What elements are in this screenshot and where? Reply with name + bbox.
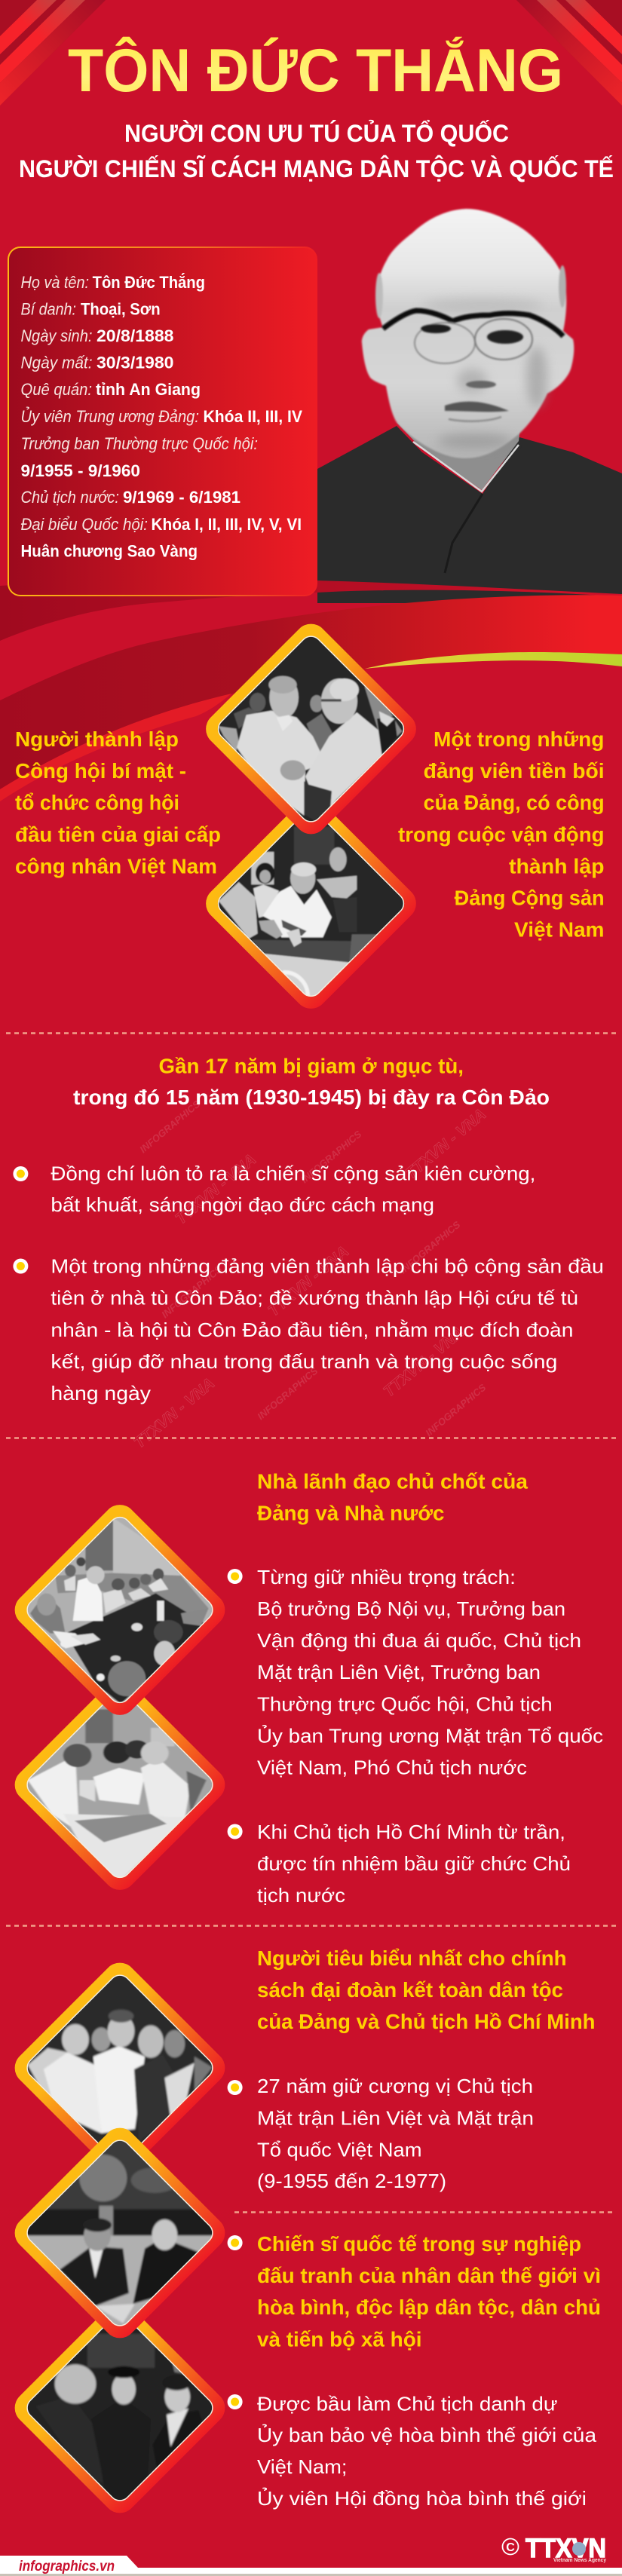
headline right: trong cuộc vận động (398, 823, 605, 846)
watermarks: INFOGRAPHICS (159, 1263, 225, 1320)
central committee: Ủy viên Trung ương Đảng: (21, 406, 199, 426)
decorative corner stripes right (516, 0, 622, 106)
bullet text: responsibilities: Bộ trưởng Bộ Nội vụ, Trưởng ban (257, 1597, 565, 1620)
decorative corner stripes left (0, 0, 106, 106)
bullet text: 27 years: Mặt trận Liên Việt và Mặt trận (257, 2106, 534, 2129)
watermarks: TTXVN - VNA (402, 1105, 489, 1183)
bullet text: responsibilities (257, 1566, 603, 1779)
watermarks: TTXVN - VNA (265, 1242, 352, 1320)
bullet icon (228, 1824, 243, 1839)
bullet text: Con Dao party cell: kết, giúp đỡ nhau trong đấu tranh và trong cuộc sống (51, 1350, 557, 1373)
state president: Chủ tịch nước: (21, 488, 119, 507)
central committee: Khóa II, III, IV (204, 407, 302, 426)
section heading (257, 1470, 529, 1524)
assembly deputy: Đại biểu Quốc hội: (21, 515, 148, 534)
hometown: Quê quán: (21, 380, 92, 399)
bullet icon (228, 1569, 243, 1584)
photo diamond: casting ballot (206, 816, 416, 1009)
logo: TTXVN: TTXVN (525, 2534, 606, 2563)
watermarks: INFOGRAPHICS (137, 1098, 203, 1155)
bullet text: steadfast communist: bất khuất, sáng ngời đạo đức cách mạng (51, 1193, 434, 1216)
bullet text: Con Dao party cell (51, 1254, 604, 1404)
alias: Bí danh: (21, 300, 76, 318)
watermarks: INFOGRAPHICS (397, 1219, 463, 1276)
headline right: đảng viên tiền bối (424, 759, 605, 783)
section heading: Người tiêu biểu nhất cho chính (257, 1947, 567, 1970)
bullet text: responsibilities: Từng giữ nhiều trọng trách: (257, 1566, 516, 1588)
headline left: công nhân Việt Nam (15, 855, 217, 878)
bullet icon (228, 2235, 243, 2250)
logo: TTXVN: Vietnam News Agency (553, 2558, 606, 2563)
watermarks: TTXVN - VNA (130, 1374, 218, 1452)
bullet text: responsibilities: Việt Nam, Phó Chủ tịch nước (257, 1757, 527, 1779)
central committee (21, 406, 302, 426)
full name: Tôn Đức Thắng (93, 273, 205, 292)
alias (21, 300, 161, 318)
section heading (257, 2232, 601, 2351)
section: great national unity (228, 1947, 596, 2192)
bullet icon (13, 1166, 28, 1181)
bullet text: Con Dao party cell: hàng ngày (51, 1382, 151, 1404)
birth date (21, 326, 173, 345)
birth date: 20/8/1888 (97, 326, 173, 345)
footer strip (0, 2556, 622, 2576)
state president (21, 488, 241, 507)
portrait photo (317, 209, 622, 603)
watermarks (130, 1098, 489, 1452)
section heading: trong đó 15 năm (1930-1945) bị đày ra Côn Đảo (73, 1086, 550, 1109)
bullet text: peace council: Được bầu làm Chủ tịch danh dự (257, 2393, 558, 2415)
headline right: thành lập (509, 855, 605, 878)
assembly deputy: Khóa I, II, III, IV, V, VI (151, 515, 302, 534)
bullet text: responsibilities: Thường trực Quốc hội, Chủ tịch (257, 1693, 553, 1716)
photo diamond: seated women and elders (15, 2320, 225, 2513)
section heading (257, 1947, 596, 2033)
national assembly standing committee (21, 434, 258, 480)
bullet text: peace council: Ủy viên Hội đồng hòa bình thế giới (257, 2486, 587, 2510)
bullet text: 27 years (257, 2075, 534, 2192)
bullet icon (228, 2394, 243, 2409)
death date (21, 353, 173, 372)
photo diamond: group of delegates (15, 1963, 225, 2150)
logo: TTXVN: C (506, 2541, 515, 2554)
bullet text: responsibilities: Ủy ban Trung ương Mặt trận Tổ quốc (257, 1723, 603, 1747)
section heading: đấu tranh của nhân dân thế giới vì (257, 2264, 601, 2287)
photo diamond: meeting table (15, 1505, 225, 1715)
headline right: Một trong những (434, 727, 605, 751)
title: TÔN ĐỨC THẮNG (68, 36, 563, 105)
section heading (73, 1054, 550, 1109)
section: prison years (13, 1054, 604, 1404)
headline left: Người thành lập (15, 727, 179, 751)
bullet text: elected president: Khi Chủ tịch Hồ Chí Minh từ trần, (257, 1821, 565, 1843)
bullet text: responsibilities: Mặt trận Liên Việt, Trưởng ban (257, 1661, 541, 1683)
national assembly standing committee: 9/1955 - 9/1960 (21, 461, 140, 480)
hometown (21, 380, 201, 399)
section heading: Đảng và Nhà nước (257, 1502, 445, 1524)
subtitle (19, 120, 614, 182)
bullet icon (13, 1259, 28, 1274)
full name (21, 273, 205, 292)
watermarks: INFOGRAPHICS (255, 1365, 320, 1422)
assembly deputy (21, 515, 302, 534)
section heading: Gần 17 năm bị giam ở ngục tù, (158, 1054, 464, 1078)
bullet text: peace council (257, 2393, 597, 2510)
bullet text: elected president (257, 1821, 571, 1907)
bullet text: peace council: Ủy ban bảo vệ hòa bình thế giới của (257, 2423, 597, 2446)
photo diamond: standing over map (15, 1698, 225, 1890)
headline left (15, 727, 221, 878)
section heading: của Đảng và Chủ tịch Hồ Chí Minh (257, 2010, 596, 2033)
headline left: đầu tiên của giai cấp (15, 823, 221, 846)
national assembly standing committee: Trưởng ban Thường trực Quốc hội: (21, 434, 258, 453)
bullet text: 27 years: 27 năm giữ cương vị Chủ tịch (257, 2075, 533, 2097)
bullet text: Con Dao party cell: Một trong những đảng viên thành lập chi bộ cộng sản đầu (51, 1254, 604, 1277)
bullet text: Con Dao party cell: tiên ở nhà tù Côn Đảo; đề xướng thành lập Hội cứu tế tù (51, 1286, 578, 1309)
headline right: của Đảng, có công (424, 791, 605, 814)
headline left: Công hội bí mật - (15, 759, 186, 783)
watermarks: TTXVN - VNA (380, 1323, 467, 1401)
bullet text: peace council: Việt Nam; (257, 2455, 347, 2478)
headline right (398, 727, 605, 941)
full name: Họ và tên: (21, 273, 89, 292)
photo diamond: conversation with foreign guest (15, 2127, 225, 2339)
bullet text: elected president: được tín nhiệm bầu giữ chức Chủ (257, 1852, 571, 1875)
death date: 30/3/1980 (97, 353, 173, 372)
watermarks: INFOGRAPHICS (423, 1382, 489, 1438)
alias: Thoại, Sơn (81, 300, 161, 318)
death date: Ngày mất: (21, 353, 92, 372)
section heading: Chiến sĩ quốc tế trong sự nghiệp (257, 2232, 581, 2256)
headline right: Việt Nam (514, 918, 605, 941)
bullet text: 27 years: (9-1955 đến 2-1977) (257, 2170, 446, 2192)
swoosh bands (0, 579, 622, 801)
section heading: sách đại đoàn kết toàn dân tộc (257, 1978, 563, 2002)
hometown: tỉnh An Giang (96, 380, 201, 399)
bullet text: steadfast communist: Đồng chí luôn tỏ ra là chiến sĩ cộng sản kiên cường, (51, 1162, 535, 1185)
footer strip: infographics.vn (19, 2559, 115, 2574)
photo diamond: two leaders greeting (206, 624, 416, 834)
headline left: tổ chức công hội (15, 791, 179, 814)
subtitle: NGƯỜI CON ƯU TÚ CỦA TỔ QUỐC (124, 120, 509, 147)
bullet text: Con Dao party cell: nhân - là hội tù Côn Đảo đầu tiên, nhằm mục đích đoàn (51, 1319, 573, 1341)
bullet text: 27 years: Tổ quốc Việt Nam (257, 2138, 422, 2161)
watermarks: INFOGRAPHICS (299, 1129, 364, 1185)
bullet text: steadfast communist (51, 1162, 535, 1216)
section: key leader (228, 1470, 603, 1907)
section heading: và tiến bộ xã hội (257, 2328, 422, 2351)
headline right: Đảng Cộng sản (455, 887, 605, 909)
section: international fighter (228, 2232, 601, 2510)
watermarks: TTXVN - VNA (172, 1150, 259, 1228)
gold star order: Huân chương Sao Vàng (21, 541, 198, 561)
section heading: Nhà lãnh đạo chủ chốt của (257, 1470, 529, 1493)
bullet icon (228, 2080, 243, 2095)
birth date: Ngày sinh: (21, 326, 92, 345)
state president: 9/1969 - 6/1981 (123, 488, 241, 507)
panel: biography facts (8, 247, 317, 596)
section heading: hòa bình, độc lập dân tộc, dân chủ (257, 2296, 601, 2319)
bullet text: elected president: tịch nước (257, 1884, 345, 1907)
bullet text: responsibilities: Vận động thi đua ái quốc, Chủ tịch (257, 1629, 581, 1652)
